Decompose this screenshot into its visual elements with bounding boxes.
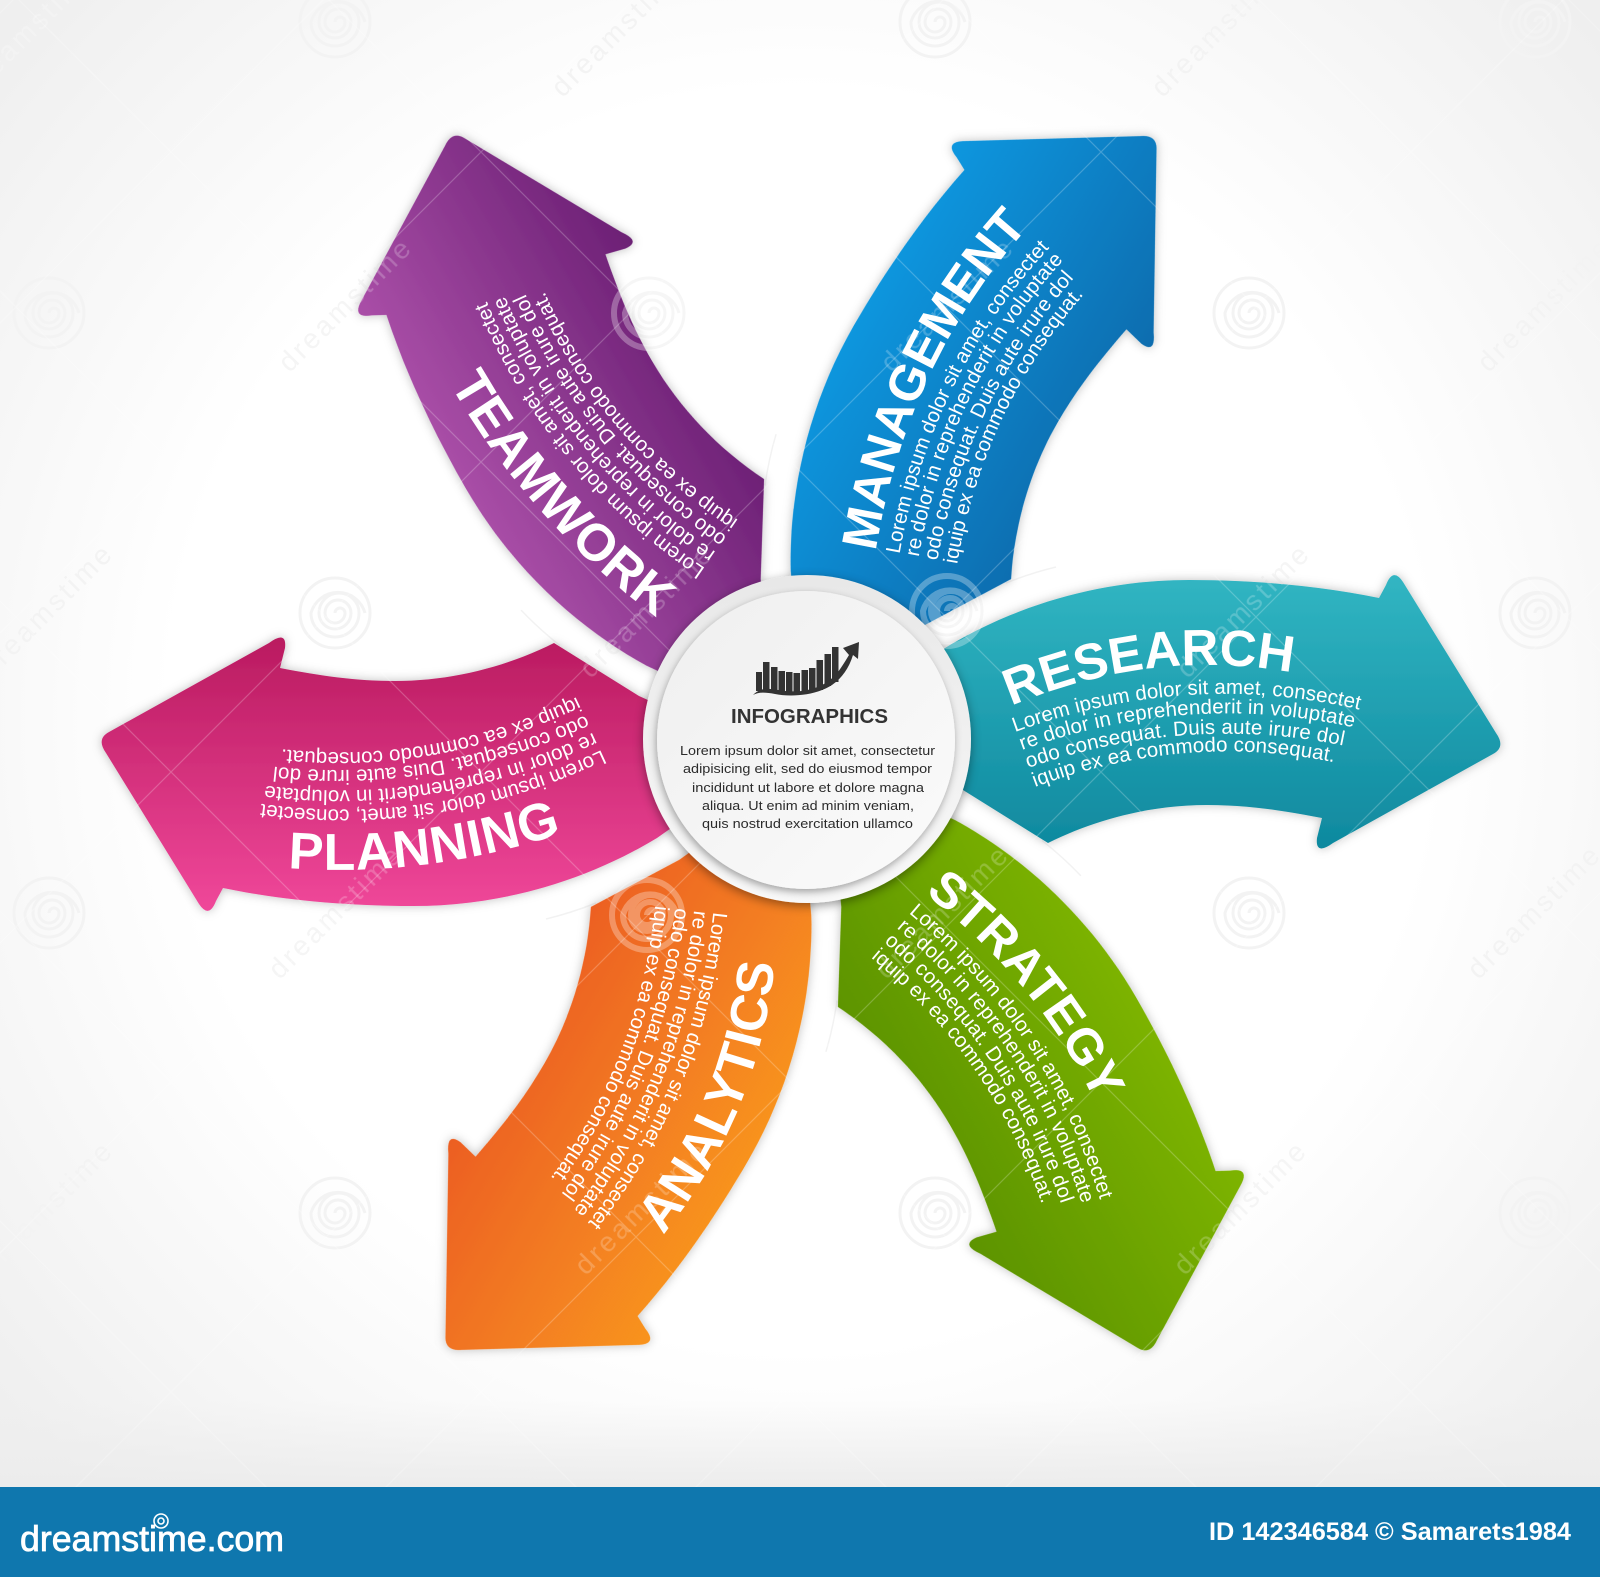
- heading: management: MANAGEMENT: [842, 204, 1021, 548]
- circle body text: Lorem ipsum dolor sit amet, consectetur: [680, 743, 936, 758]
- heading: strategy: STRATEGY: [930, 872, 1126, 1090]
- arrow shape: orange: [360, 760, 906, 1433]
- panel: analytics arrow: [440, 850, 817, 1356]
- icon: rising bar chart with arrow: [753, 642, 859, 695]
- paragraph: research: Lorem ipsum dolor sit amet, consectet re dolor in reprehenderit in voluptate odo consequat. Duis aute irure dol iquip ex ea commodo consequat.: [1012, 680, 1362, 787]
- paragraph: analytics: Lorem ipsum dolor sit amet, consectet re dolor in reprehenderit in voluptate odo consequat. Duis aute irure dol iquip ex ea commodo consequat.: [552, 906, 728, 1230]
- panel: management arrow: [785, 130, 1162, 628]
- footer credit: ID 142346584 © Samarets1984: [1209, 1518, 1571, 1546]
- watermark under the arrows: dreamstime: [874, 231, 1021, 378]
- circle heading: INFOGRAPHICS: [731, 705, 888, 728]
- arrow shape: purple: [306, 85, 852, 758]
- watermark over the arrows: dreamstime: [1170, 537, 1317, 684]
- arrow shape: blue: [696, 53, 1242, 726]
- watermark under the arrows: dreamstime: [869, 838, 1016, 985]
- center circle: [643, 575, 971, 903]
- watermark over the arrows: dreamstime: [869, 838, 1016, 985]
- circle body text: quis nostrud exercitation ullamco: [702, 816, 913, 831]
- circle body text: aliqua. Ut enim ad minim veniam,: [702, 798, 914, 813]
- heading: planning: PLANNING: [292, 803, 558, 870]
- paragraph: management: Lorem ipsum dolor sit amet, consectet re dolor in reprehenderit in voluptate odo consequat. Duis aute irure dol iquip ex ea commodo consequat.: [886, 240, 1082, 563]
- outer ring: [643, 575, 971, 903]
- watermark under the arrows: dreamstime: [1167, 1134, 1314, 1281]
- circle body text: adipisicing elit, sed do eiusmod tempor: [683, 761, 933, 776]
- panel: strategy arrow: [832, 814, 1248, 1355]
- watermark over the arrows: dreamstime: [573, 537, 720, 684]
- watermark over the arrows: dreamstime: [262, 838, 409, 985]
- watermark under the arrows: dreamstime: [568, 1134, 715, 1281]
- icon: logo spiral: [154, 1514, 168, 1528]
- arrow shape: green: [750, 728, 1296, 1401]
- heading: analytics: ANALYTICS: [643, 962, 774, 1234]
- paragraph: strategy: Lorem ipsum dolor sit amet, consectetre dolor in reprehenderit in voluptateodo consequat. Duis aute irure doliquip ex ea commodo consequat.: [872, 903, 1112, 1203]
- watermark over the arrows: dreamstime: [272, 231, 419, 378]
- circle body text: [680, 743, 936, 831]
- watermark under the arrows: dreamstime: [1170, 537, 1317, 684]
- paragraph: teamwork: Lorem ipsum dolor sit amet, consectet re dolor in reprehenderit in voluptate odo consequat. Duis aute irure dol iquip ex ea commodo consequat.: [476, 293, 738, 579]
- circle body text: incididunt ut labore et dolore magna: [692, 780, 925, 795]
- panel: teamwork arrow: [354, 131, 770, 675]
- paragraph: planning: Lorem ipsum dolor sit amet, consectet re dolor in reprehenderit in voluptate odo consequat. Duis aute irure dol iquip ex ea commodo consequat.: [260, 698, 606, 822]
- watermark under the arrows: dreamstime: [573, 537, 720, 684]
- watermark under the arrows: dreamstime: [272, 231, 419, 378]
- heading: research: RESEARCH: [1002, 630, 1294, 704]
- footer logo: dreamstime.com: [20, 1518, 284, 1559]
- inner disc: [657, 591, 955, 889]
- footer bar: [0, 1487, 1600, 1577]
- heading: teamwork: TEAMWORK: [456, 366, 678, 618]
- watermark over the arrows: dreamstime: [568, 1134, 715, 1281]
- arrow shape: teal: [881, 575, 1500, 848]
- watermark over the arrows: dreamstime: [874, 231, 1021, 378]
- panel: planning arrow: [97, 634, 672, 914]
- watermark over the arrows: dreamstime: [1167, 1134, 1314, 1281]
- arrow shape: pink: [102, 638, 721, 911]
- watermark under the arrows: dreamstime: [262, 838, 409, 985]
- panel: research arrow: [942, 572, 1505, 852]
